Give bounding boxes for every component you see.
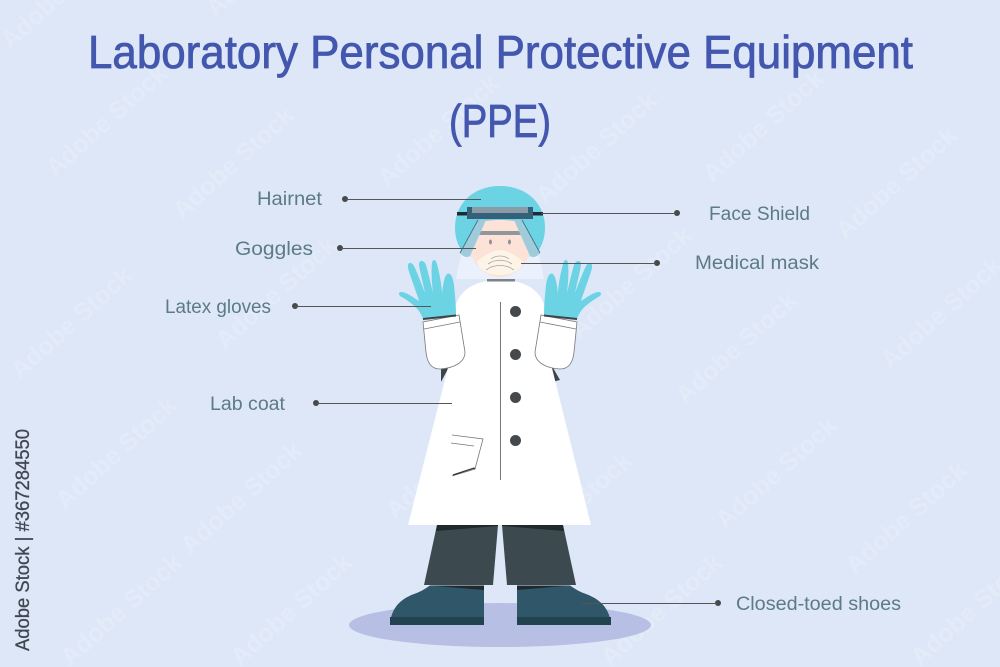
watermark pattern: Adobe Stock — [697, 64, 830, 187]
stock credit: Adobe Stock | #367284550 — [13, 429, 34, 651]
label: latex gloves: Latex gloves — [165, 297, 271, 318]
label: hairnet — [257, 189, 481, 210]
label: medical mask: Medical mask — [695, 253, 820, 274]
dark under-arm shadows — [441, 366, 560, 382]
face shield lower panel — [456, 250, 544, 279]
lab coat — [408, 281, 591, 525]
trousers — [424, 525, 576, 585]
face — [470, 220, 530, 277]
label: goggles: Goggles — [235, 239, 313, 260]
right sleeve cuff — [535, 315, 577, 369]
title — [88, 26, 913, 147]
watermark pattern: Adobe Stock — [380, 401, 513, 524]
watermark pattern: Adobe Stock — [565, 221, 698, 344]
label: medical mask — [521, 253, 820, 274]
latex glove left — [399, 260, 456, 319]
label: face shield: Face Shield — [709, 204, 810, 225]
goggles — [460, 220, 540, 257]
watermark pattern: Adobe Stock — [840, 456, 973, 579]
title: Laboratory Personal Protective Equipment — [88, 26, 913, 78]
face shield band — [457, 207, 543, 219]
watermark pattern: Adobe Stock — [50, 391, 183, 514]
collar — [487, 279, 515, 282]
watermark pattern: Adobe Stock — [5, 261, 138, 384]
floor shadow — [349, 603, 651, 647]
label: face shield — [541, 204, 810, 225]
medical mask — [477, 250, 523, 275]
coat buttons — [510, 306, 521, 446]
label: closed-toed shoes: Closed-toed shoes — [736, 594, 901, 615]
watermark pattern: Adobe Stock — [372, 69, 505, 192]
hairnet — [455, 186, 545, 257]
figure: lab worker — [390, 186, 611, 625]
label: lab coat: Lab coat — [210, 394, 286, 415]
left sleeve cuff — [423, 315, 465, 369]
watermark pattern: Adobe Stock — [830, 121, 963, 244]
label: goggles — [235, 239, 476, 260]
eyes — [489, 240, 511, 244]
label: closed-toed shoes — [582, 594, 901, 615]
watermark pattern: Adobe Stock — [167, 101, 300, 224]
watermark pattern: Adobe Stock — [530, 86, 663, 209]
latex glove right — [544, 260, 601, 319]
coat centre line — [500, 302, 502, 480]
watermark pattern: Adobe Stock — [175, 436, 308, 559]
title: (PPE) — [449, 95, 551, 147]
closed-toed shoes — [390, 586, 611, 625]
label: latex gloves — [165, 297, 431, 318]
label: lab coat — [210, 394, 452, 415]
watermark pattern: Adobe Stock — [40, 59, 173, 182]
watermark pattern: Adobe Stock — [210, 231, 343, 354]
watermark pattern: Adobe Stock — [505, 446, 638, 569]
label: hairnet: Hairnet — [257, 189, 323, 210]
watermark pattern: Adobe Stock — [710, 411, 843, 534]
coat pocket — [451, 435, 483, 476]
watermark pattern: Adobe Stock — [670, 286, 803, 409]
